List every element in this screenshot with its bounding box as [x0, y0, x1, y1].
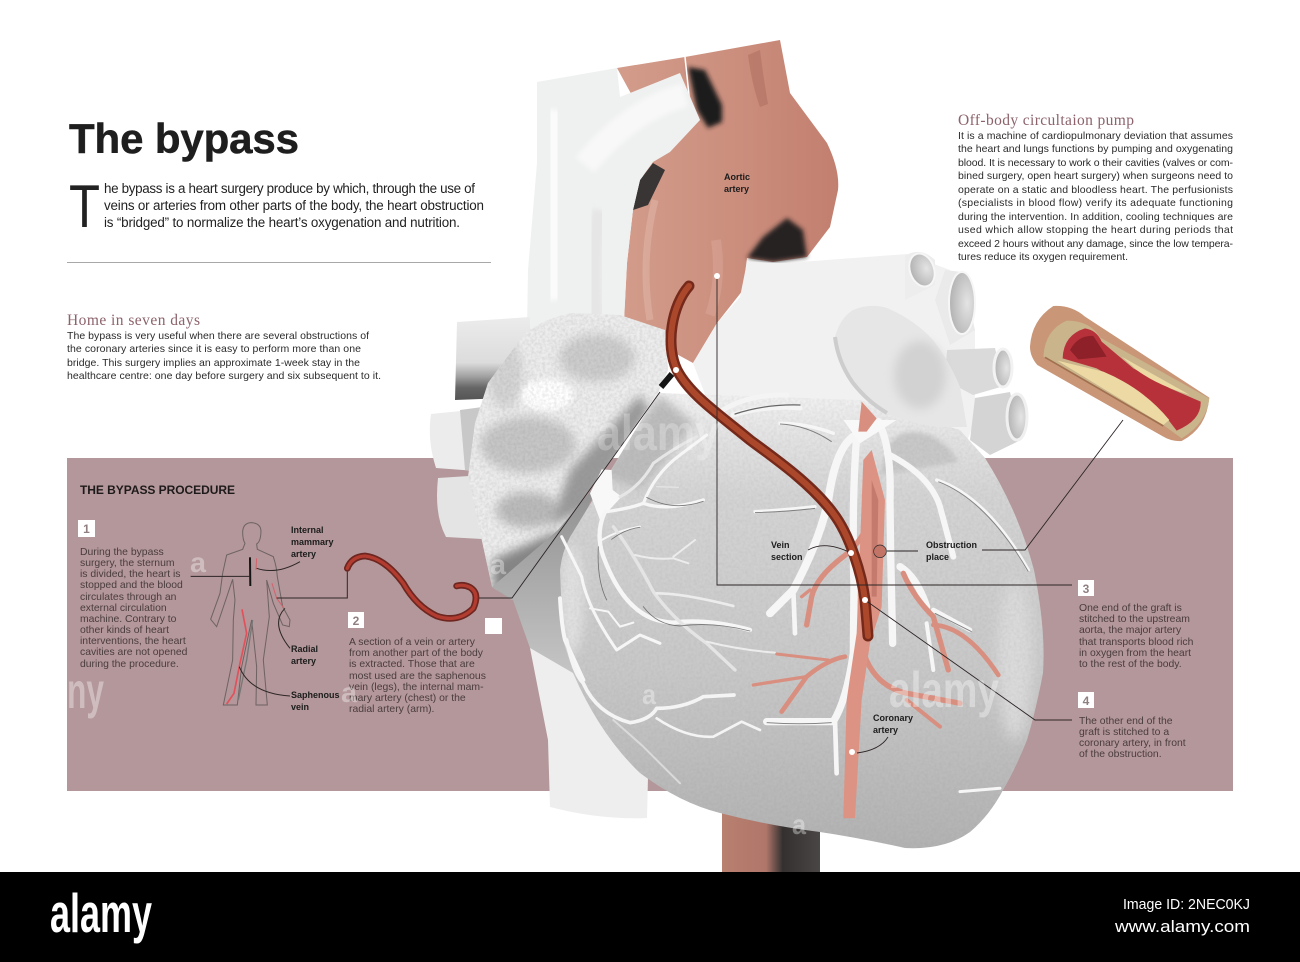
text block: home in seven days: The bypass is very useful when there are several obstructions of: [67, 330, 369, 342]
text block: off-body circulation pump: tures reduce its oxygen requirement.: [958, 251, 1128, 263]
step 1: other kinds of heart: [80, 625, 169, 636]
step 3: that transports blood rich: [1079, 637, 1194, 648]
heart ventricles: [560, 393, 1044, 848]
bypass graft on heart: [671, 286, 868, 636]
intro text block: he bypass is a heart surgery produce by which, through the use of: [104, 181, 475, 196]
pulmonary trunk: [693, 254, 975, 460]
labels: body diagram: artery: [291, 656, 316, 666]
vein shadows: [755, 424, 1028, 724]
step 3: [1078, 580, 1194, 670]
leader lines: [478, 276, 1123, 753]
step 4: graft is stitched to a: [1079, 727, 1169, 738]
extracted graft: [347, 556, 476, 618]
text block: off-body circulation pump: during the intervention. In addition, cooling techniques are: [958, 211, 1233, 223]
step 1: 1: [83, 522, 90, 536]
labels: heart: artery: [724, 184, 749, 194]
watermarks: alamy: [597, 405, 719, 461]
step 1: During the bypass: [80, 547, 164, 558]
diagram: human body with vessels: [191, 523, 510, 705]
inferior vena cava: [530, 600, 700, 818]
step 3: to the rest of the body.: [1079, 659, 1182, 670]
text block: off-body circulation pump: It is a machine of cardiopulmonary deviation that assumes: [958, 130, 1233, 142]
watermarks: ny: [67, 663, 104, 719]
labels: body diagram: [291, 525, 340, 712]
labels: heart: Vein: [771, 540, 790, 550]
labels: heart: Obstruction: [926, 540, 977, 550]
watermarks: a: [341, 677, 357, 708]
step 3: stitched to the upstream: [1079, 614, 1190, 625]
labels: body diagram: artery: [291, 549, 316, 559]
drop cap: T: [69, 173, 100, 240]
step 2: A section of a vein or artery: [349, 637, 476, 648]
coronary arteries, detail group: [753, 402, 1028, 818]
step 1: is divided, the heart is: [80, 569, 180, 580]
text block: home in seven days: the coronary arteries since it is easy to perform more than one: [67, 343, 361, 355]
step 1: interventions, the heart: [80, 636, 186, 647]
blank number box: [485, 618, 502, 634]
dark gap and grey mark behind the branch: [633, 163, 665, 210]
right atrium: [460, 310, 670, 605]
watermarks: a: [642, 679, 656, 710]
footer bar: [0, 872, 1300, 962]
watermarks: alamy: [889, 662, 999, 718]
coronary veins on left ventricle: [560, 435, 775, 680]
labels: body diagram: vein: [291, 702, 309, 712]
text block: off-body circulation pump: (specialists in blood flow) verify its adequate functioning: [958, 197, 1233, 209]
step 1: during the procedure.: [80, 659, 179, 670]
text block: off-body circulation pump: operate on a static and bloodless heart. The perfusionists: [958, 184, 1233, 196]
footer bar: Image ID: 2NEC0KJ: [1123, 896, 1250, 913]
step 3: One end of the graft is: [1079, 603, 1182, 614]
step 3: in oxygen from the heart: [1079, 648, 1191, 659]
left pulmonary vein tubes: [430, 317, 530, 540]
shadow wedge under the atrium: [492, 480, 600, 673]
arteries: [753, 527, 998, 727]
illustration: heart: [430, 40, 1050, 872]
watermarks: a: [792, 809, 806, 840]
step 1: machine. Contrary to: [80, 614, 177, 625]
text block: off-body circulation pump: [958, 112, 1234, 263]
left atrial appendage: [835, 306, 967, 427]
step 1: surgery, the sternum: [80, 558, 175, 569]
text block: off-body circulation pump: bined surgery, open heart surgery) when surgeons need to: [958, 170, 1233, 182]
upper veins on the trunk: [723, 395, 800, 415]
step 2: vein (legs), the internal mam-: [349, 682, 484, 693]
step 1: cavities are not opened: [80, 647, 188, 658]
step 2: radial artery (arm).: [349, 704, 434, 715]
step 1: stopped and the blood: [80, 580, 183, 591]
labels: body diagram: mammary: [291, 537, 334, 547]
step 3: 3: [1083, 582, 1090, 596]
labels: heart: Aortic: [724, 172, 750, 182]
text block: home in seven days: healthcare centre: one day before surgery and six subsequent to it.: [67, 370, 381, 382]
footer bar: alamy: [50, 882, 152, 944]
panel: bypass procedure background: [67, 458, 1233, 791]
procedure heading: THE BYPASS PROCEDURE: [80, 483, 235, 497]
step 3: aorta, the major artery: [1079, 625, 1182, 636]
intro text block: veins or arteries from other parts of the body, the heart obstruction: [104, 198, 484, 213]
labels: body diagram: Internal: [291, 525, 324, 535]
text block: off-body circulation pump: Off-body circultaion pump: [958, 112, 1134, 129]
watermarks: a: [490, 549, 506, 580]
text block: home in seven days: bridge. This surgery implies an approximate 1-week stay in the: [67, 357, 360, 369]
watermarks: a: [190, 547, 206, 578]
step 2: most used are the saphenous: [349, 671, 486, 682]
step 4: [1078, 692, 1186, 760]
obstruction marker: [874, 545, 886, 558]
footer bar: www.alamy.com: [1114, 917, 1250, 936]
descending aorta: [722, 810, 820, 872]
text block: home in seven days: [67, 312, 381, 382]
text block: home in seven days: Home in seven days: [67, 312, 200, 329]
labels: heart: Coronary: [873, 713, 913, 723]
arterial cross-section illustration: [1030, 306, 1209, 441]
watermarks: [67, 405, 999, 840]
step 4: 4: [1083, 694, 1090, 708]
step 2: [348, 612, 486, 715]
labels: heart: artery: [873, 725, 898, 735]
intro text block: is “bridged” to normalize the heart’s oxygenation and nutrition.: [104, 215, 460, 230]
step 2: from another part of the body: [349, 648, 484, 659]
step 2: 2: [353, 614, 360, 628]
labels: heart: [724, 172, 977, 735]
text block: off-body circulation pump: the heart and lungs functions by pumping and oxygenating: [958, 143, 1233, 155]
step 4: of the obstruction.: [1079, 749, 1162, 760]
veins: [755, 420, 1028, 792]
labels: heart: section: [771, 552, 803, 562]
coronary veins on lower ventricle: [567, 640, 760, 783]
labels: body diagram: Saphenous: [291, 690, 340, 700]
title: The bypass: [69, 115, 299, 162]
pink stub at top: [858, 402, 877, 432]
great vessels, right: [905, 250, 1027, 455]
text block: off-body circulation pump: exceed 2 hours without any damage, since the low tempera-: [958, 238, 1234, 250]
step 2: mary artery (chest) or the: [349, 693, 466, 704]
text block: off-body circulation pump: blood. It is necessary to work o their cavities (valves or com-: [958, 157, 1234, 169]
labels: body diagram: Radial: [291, 644, 318, 654]
text block: off-body circulation pump: used which allow stopping the heart during periods that: [958, 224, 1233, 236]
intro text block: [69, 173, 484, 240]
cannula: [661, 374, 672, 387]
main coronary trunk: [843, 450, 885, 818]
superior vena cava and branch: [527, 68, 700, 332]
aorta: [617, 40, 838, 363]
step 1: [78, 520, 188, 670]
step 2: is extracted. Those that are: [349, 659, 475, 670]
step 1: circulates through an: [80, 592, 177, 603]
divider: [67, 262, 491, 263]
labels: heart: place: [926, 552, 949, 562]
step 1: external circulation: [80, 603, 167, 614]
step 4: coronary artery, in front: [1079, 738, 1186, 749]
anchor dots: [673, 273, 868, 755]
step 4: The other end of the: [1079, 716, 1173, 727]
